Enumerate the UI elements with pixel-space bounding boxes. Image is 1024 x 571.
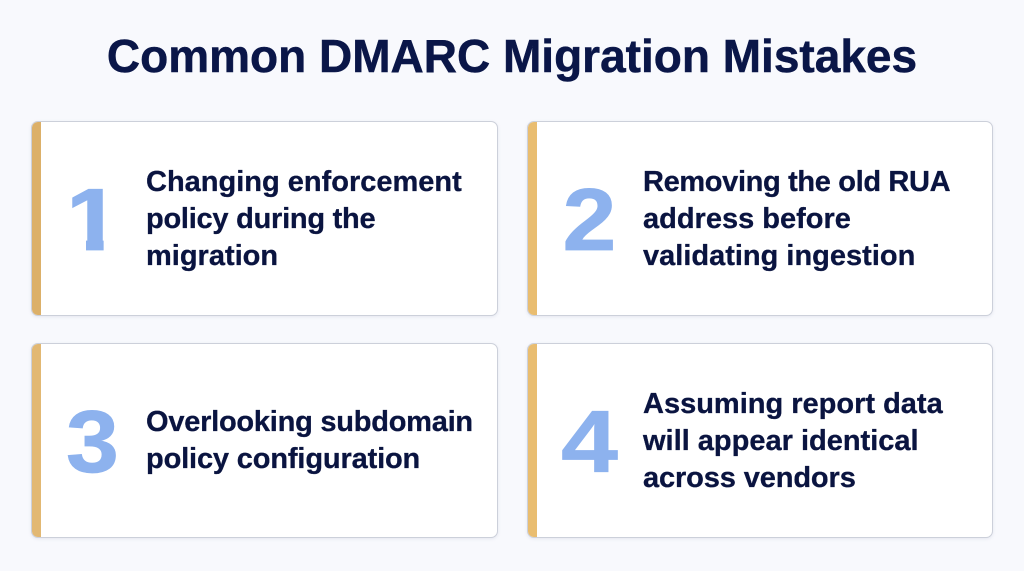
panel: mistake 4 [527,343,993,538]
accent bar 1 [31,121,41,316]
panel: mistake 1 [31,121,498,316]
text 4: will appear identical [643,425,919,457]
title: Common DMARC Migration Mistakes [107,30,917,82]
text 3 [146,406,473,475]
accent bar 4 [527,343,537,538]
text 1: migration [146,240,278,272]
panel: mistake 3 [31,343,498,538]
panel: mistake 2 [527,121,993,316]
text 1: policy during the [146,203,375,235]
number 2: 2 [562,170,616,269]
text 3: policy configuration [146,443,420,475]
number 3: 3 [66,392,118,491]
text 1: Changing enforcement [146,166,462,198]
text 2: Removing the old RUA [643,166,950,198]
number 1: 1 [63,170,122,269]
number 4: 4 [561,392,617,491]
text 2: address before [643,203,851,235]
text 2 [642,166,950,272]
text 2: validating ingestion [643,240,915,272]
text 4: Assuming report data [643,388,943,420]
text 1 [146,166,462,272]
text 4 [642,388,944,494]
accent bar 2 [527,121,537,316]
accent bar 3 [31,343,41,538]
text 4: across vendors [643,462,856,494]
text 3: Overlooking subdomain [146,406,473,438]
